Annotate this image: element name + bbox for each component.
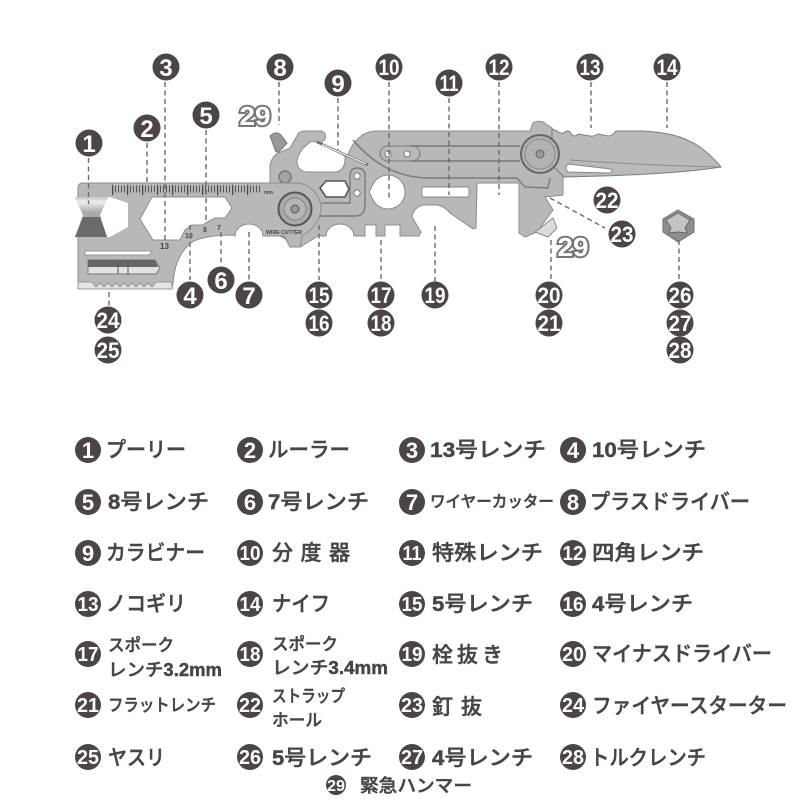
callout 8 — [266, 54, 294, 82]
legend item 21: 21 — [77, 695, 99, 717]
legend item 25: ヤスリ — [108, 747, 165, 770]
legend item 19 — [399, 641, 503, 667]
legend item 29: 緊急ハンマー — [360, 776, 472, 796]
legend item 23: 釘抜 — [432, 696, 482, 719]
blade slot — [566, 164, 612, 173]
legend item 12 — [560, 540, 704, 566]
legend item 24: 24 — [562, 695, 585, 717]
legend item 16: 4号レンチ — [592, 593, 693, 616]
callout 20: 20 — [538, 283, 560, 308]
callout 5: 5 — [199, 103, 213, 130]
callout 11: 11 — [440, 71, 458, 96]
legend item 11: 特殊レンチ — [432, 542, 543, 565]
legend item 22 — [237, 687, 345, 730]
left ruler body — [78, 183, 321, 288]
callout 9 — [324, 70, 352, 98]
legend item 20: マイナスドライバー — [592, 643, 772, 666]
callout 6 — [208, 266, 234, 295]
callout 5 — [192, 102, 220, 130]
legend item 17 — [75, 636, 222, 680]
special wrench slot — [422, 187, 469, 197]
legend item 22: 22 — [239, 695, 261, 717]
callout 29 right: 29 — [558, 232, 588, 262]
legend item 3: 13号レンチ — [430, 439, 546, 462]
hexagonal bit — [663, 210, 694, 242]
callout 7: 7 — [242, 283, 256, 310]
legend item 11 — [399, 540, 543, 566]
legend item 18: 18 — [240, 644, 260, 666]
ruler ticks — [112, 186, 262, 192]
callout 28: 28 — [668, 338, 692, 363]
legend item 21: フラットレンチ — [108, 696, 216, 715]
wrench size labels: 10 — [185, 233, 193, 240]
legend item 9: 9 — [82, 541, 94, 566]
legend item 18: レンチ3.4mm — [272, 658, 388, 678]
large hex and wrench holes — [70, 197, 128, 237]
legend item 9: カラビナー — [106, 542, 205, 565]
legend item 2: ルーラー — [268, 439, 350, 462]
callout 21: 21 — [538, 311, 560, 336]
flat driver tip — [535, 218, 557, 237]
callout 17: 17 — [370, 283, 392, 308]
legend item 25 — [75, 744, 165, 770]
callout 12: 12 — [488, 55, 510, 80]
legend item 15: 15 — [402, 594, 422, 616]
legend item 8: プラスドライバー — [590, 491, 750, 514]
legend item 23 — [399, 692, 482, 719]
callout 9: 9 — [331, 71, 345, 98]
legend item 28 — [560, 744, 706, 770]
blade pivot — [521, 135, 559, 173]
legend item 27: 27 — [401, 747, 423, 769]
callout 8: 8 — [273, 55, 287, 82]
callout 27: 27 — [668, 311, 692, 336]
legend item 5: 5 — [82, 490, 94, 515]
legend item 5: 8号レンチ — [108, 491, 209, 514]
legend item 2: 2 — [244, 438, 256, 463]
legend item 26: 26 — [239, 747, 261, 769]
legend item 2 — [237, 437, 350, 463]
wrench size labels: 7 — [217, 225, 221, 232]
legend item 4 — [560, 437, 706, 463]
legend item 6: 7号レンチ — [268, 491, 369, 514]
callout 2: 2 — [140, 116, 154, 143]
legend item 13 — [75, 591, 186, 617]
legend item 28: トルクレンチ — [590, 747, 706, 770]
legend item 10: 10 — [240, 543, 260, 565]
wrench size labels: 13 — [160, 242, 169, 251]
legend item 12: 四角レンチ — [592, 542, 704, 565]
callout 1: 1 — [82, 131, 96, 158]
screwdriver bit 8 — [270, 133, 287, 152]
callout 16: 16 — [308, 311, 330, 336]
legend item 7 — [399, 489, 554, 515]
legend item 13: ノコギリ — [106, 593, 186, 616]
callout 26: 26 — [668, 283, 692, 308]
legend item 26: 5号レンチ — [272, 747, 372, 770]
legend item 24: ファイヤースターター — [592, 695, 787, 718]
legend item 19: 栓抜き — [432, 644, 503, 667]
legend item 21 — [75, 692, 216, 718]
legend item 17: レンチ3.2mm — [108, 660, 222, 680]
legend item 17: スポーク — [108, 636, 174, 655]
multi tool illustration — [70, 121, 721, 289]
callout 4 — [176, 282, 204, 310]
callout 25: 25 — [96, 338, 120, 363]
dashed leader lines — [88, 82, 679, 308]
middle body and handle — [270, 121, 563, 247]
legend item 27: 4号レンチ — [432, 747, 533, 770]
legend item 9 — [75, 540, 205, 566]
legend item 7: 7 — [406, 490, 418, 515]
legend item 6 — [237, 489, 369, 515]
legend item 7: ワイヤーカッター — [430, 493, 554, 511]
small holes and frame — [320, 168, 365, 216]
legend item 8: 8 — [567, 490, 579, 515]
big pivot — [278, 192, 312, 226]
callout 4: 4 — [183, 283, 197, 310]
callout 29 left: 29 — [240, 101, 270, 131]
callout 24: 24 — [96, 308, 120, 333]
protractor hole — [369, 175, 405, 209]
legend item 14: ナイフ — [272, 593, 330, 616]
multi tool illustration: mm — [264, 190, 273, 196]
legend item 15: 5号レンチ — [432, 593, 533, 616]
legend item 16 — [560, 591, 693, 617]
legend item 18: スポーク — [272, 635, 338, 654]
callout 3: 3 — [159, 55, 173, 82]
callout 3 — [152, 54, 180, 82]
legend item 11: 11 — [402, 543, 422, 565]
legend item 13: 13 — [78, 594, 98, 616]
multi tool illustration: WIRE CUTTER — [266, 230, 302, 236]
callout 10: 10 — [378, 55, 400, 80]
carabiner hole — [297, 141, 345, 172]
legend item 1 — [75, 437, 186, 463]
wrench size labels — [160, 225, 221, 251]
legend item 15 — [399, 591, 533, 617]
legend item 1: プーリー — [106, 439, 186, 462]
callout 22: 22 — [596, 188, 618, 213]
legend item 28: 28 — [562, 747, 584, 769]
legend item 23: 23 — [401, 695, 423, 717]
fire starter — [85, 251, 160, 274]
legend item 14 — [237, 591, 330, 617]
legend item 26 — [237, 744, 372, 770]
handle lines — [353, 140, 550, 188]
callout 19: 19 — [424, 283, 446, 308]
legend item 3: 3 — [406, 438, 418, 463]
legend item 12: 12 — [562, 543, 584, 565]
legend item 4: 4 — [567, 438, 580, 463]
legend item 10 — [237, 540, 350, 566]
legend item 3 — [399, 437, 546, 463]
legend item 4: 10号レンチ — [592, 439, 706, 462]
legend item 25: 25 — [77, 747, 99, 769]
legend item 29: 29 — [327, 778, 345, 795]
legend item 1: 1 — [82, 438, 94, 463]
wrench size labels: 8 — [203, 227, 207, 234]
legend item 16: 16 — [562, 594, 584, 616]
callout 13: 13 — [580, 55, 600, 80]
callout 23: 23 — [610, 222, 634, 247]
callout 7 — [236, 282, 262, 310]
carabiner gate — [317, 142, 368, 165]
legend item 14: 14 — [240, 594, 261, 616]
callout 15: 15 — [308, 283, 330, 308]
callout 18: 18 — [370, 311, 392, 336]
pulley — [75, 197, 108, 237]
legend item 10: 分度器 — [272, 542, 350, 565]
callout 6: 6 — [214, 268, 228, 295]
legend item 17: 17 — [78, 644, 98, 666]
legend item 19: 19 — [402, 644, 422, 666]
legend item 27 — [399, 744, 533, 770]
legend item 22: ストラップ — [272, 687, 345, 706]
callout 1 — [76, 130, 102, 158]
legend item 18 — [237, 635, 388, 678]
blade — [552, 129, 721, 177]
legend item 20: 20 — [562, 644, 584, 666]
callout 14: 14 — [656, 55, 678, 80]
legend item 5 — [75, 489, 209, 515]
hex hole — [320, 181, 349, 197]
callout 2 — [134, 114, 160, 143]
legend item 22: ホール — [272, 711, 322, 730]
legend item 6: 6 — [244, 490, 256, 515]
file teeth — [78, 282, 172, 289]
